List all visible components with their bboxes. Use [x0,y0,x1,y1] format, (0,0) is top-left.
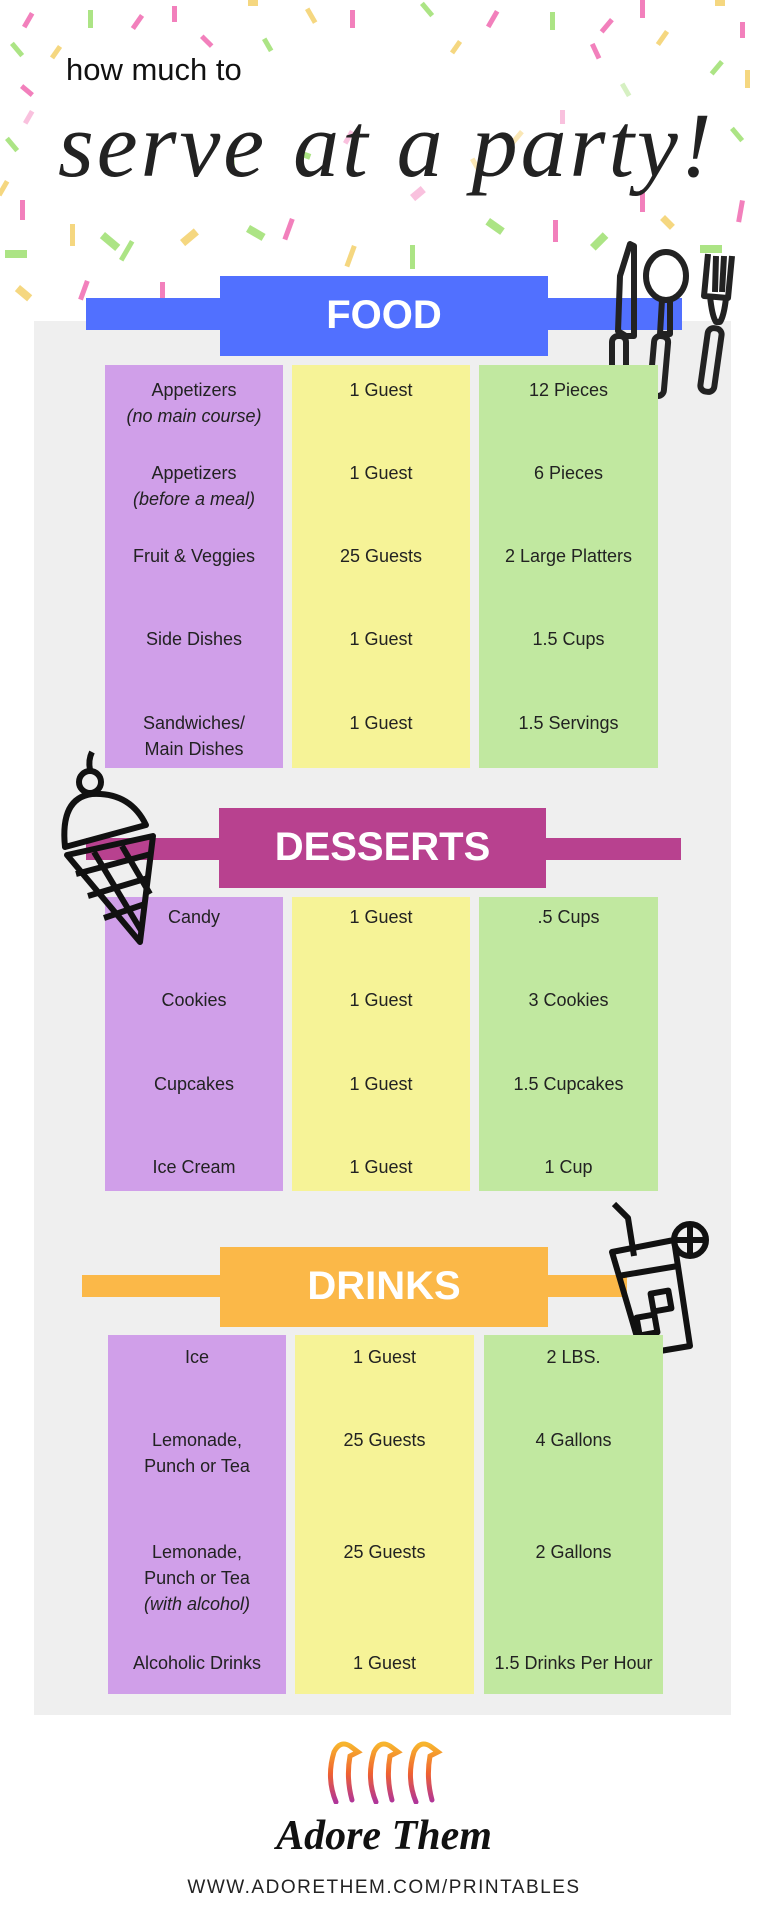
column: drink items: Ice [185,1347,209,1367]
column: dessert guests: 1 Guest [349,907,413,927]
column: drink amounts: 4 Gallons [535,1430,612,1450]
icon: drink glass [609,1202,709,1354]
banner: FOOD [86,276,682,356]
column: food items: Appetizers [151,463,237,483]
column: drink guests: 25 Guests [343,1430,426,1450]
confetti background [0,0,750,1354]
table: food [105,365,658,768]
column: food items: (no main course) [126,406,262,426]
banner: DESSERTS [86,808,681,888]
column: drink amounts: 1.5 Drinks Per Hour [494,1653,653,1673]
column: drink guests: 1 Guest [353,1347,416,1367]
column: dessert guests: 1 Guest [349,1074,413,1094]
column: food items [105,365,283,768]
column: food amounts: 12 Pieces [529,380,608,400]
column: dessert items: Candy [168,907,220,927]
column: food items: Side Dishes [146,629,242,649]
column: drink items: Punch or Tea [144,1568,250,1588]
icon: ice cream cone [61,750,156,945]
column: dessert items: Cookies [161,990,227,1010]
column: dessert guests: 1 Guest [349,990,413,1010]
column: food amounts: 1.5 Cups [532,629,605,649]
column: food items: (before a meal) [133,489,255,509]
column: food guests: 25 Guests [340,546,422,566]
column: drink items [108,1335,286,1694]
column: dessert items: Cupcakes [154,1074,234,1094]
column: food guests [292,365,470,768]
banner: DRINKS [82,1247,627,1327]
column: drink amounts [484,1335,663,1694]
column: food guests: 1 Guest [349,463,413,483]
column: food items: Appetizers [151,380,237,400]
column: drink guests [295,1335,474,1694]
column: drink amounts: 2 Gallons [535,1542,612,1562]
url: WWW.ADORETHEM.COM/PRINTABLES [187,1877,581,1898]
column: food amounts [479,365,658,768]
column: drink guests: 25 Guests [343,1542,426,1562]
icon: utensils [609,241,735,399]
column: drink items: Lemonade, [152,1542,242,1562]
table: drinks [108,1335,663,1694]
column: dessert amounts: 1 Cup [544,1157,593,1177]
column: dessert amounts: .5 Cups [537,907,600,927]
banner: DRINKS: DRINKS [307,1264,461,1308]
column: food items: Main Dishes [144,739,244,759]
column: food guests: 1 Guest [349,713,413,733]
column: dessert items: Ice Cream [152,1157,236,1177]
gray panel [34,321,731,1715]
column: drink items: Lemonade, [152,1430,242,1450]
column: dessert amounts: 3 Cookies [528,990,609,1010]
column: drink amounts: 2 LBS. [546,1347,601,1367]
column: drink items: (with alcohol) [144,1594,250,1614]
column: food amounts: 2 Large Platters [505,546,632,566]
column: drink items: Punch or Tea [144,1456,250,1476]
column: food amounts: 1.5 Servings [518,713,619,733]
column: food guests: 1 Guest [349,629,413,649]
logo text: Adore Them: Adore Them [276,1813,492,1859]
table: desserts [105,897,658,1191]
subtitle: how much to: how much to [66,52,242,87]
column: dessert items [105,897,283,1191]
banner: DESSERTS: DESSERTS [275,825,490,869]
column: dessert amounts: 1.5 Cupcakes [513,1074,624,1094]
logo: penguins [328,1742,443,1804]
column: dessert guests: 1 Guest [349,1157,413,1177]
column: dessert amounts [479,897,658,1191]
column: food items: Fruit & Veggies [133,546,255,566]
column: food items: Sandwiches/ [143,713,245,733]
column: drink items: Alcoholic Drinks [133,1653,261,1673]
title: serve at a party!: serve at a party! [58,94,715,196]
column: dessert guests [292,897,470,1191]
column: drink guests: 1 Guest [353,1653,416,1673]
column: food amounts: 6 Pieces [534,463,603,483]
column: food guests: 1 Guest [349,380,413,400]
banner: FOOD: FOOD [326,293,442,337]
